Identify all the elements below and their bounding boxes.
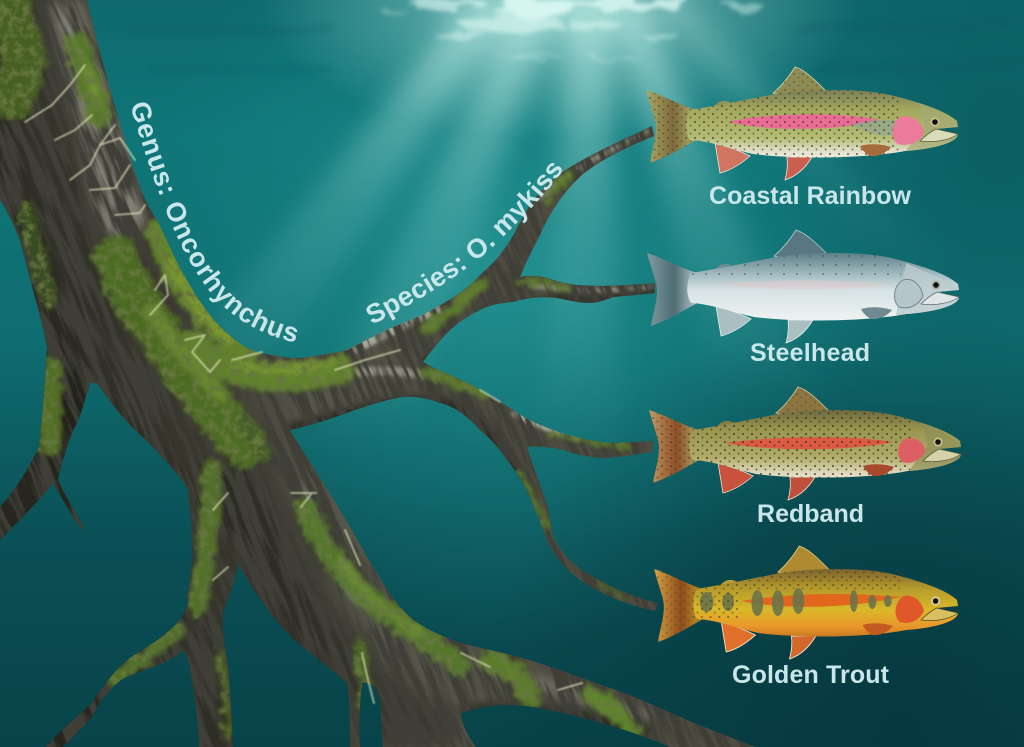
- lit bark on the upper trunk: [50, 0, 150, 255]
- fish: golden trout: [654, 546, 958, 659]
- label: species (curved): Species: O. mykiss: [366, 163, 562, 322]
- fish: redband: [649, 387, 963, 500]
- label: redband: Redband: [757, 500, 864, 528]
- fish: coastal rainbow: [646, 67, 960, 180]
- light rays: [150, 0, 960, 450]
- fish: steelhead: [647, 230, 961, 343]
- label: genus (curved): Genus: Oncorhynchus: [132, 102, 298, 342]
- label: steelhead: Steelhead: [750, 339, 870, 367]
- tree of life: trunk and branches: [0, 0, 755, 747]
- moss patches: [8, 0, 632, 738]
- directional bark grain: [0, 0, 755, 747]
- shaded sides: [33, 290, 87, 460]
- water caustic highlights: [25, 65, 582, 703]
- water surface ripples: [130, 0, 1020, 70]
- label: coastal rainbow: Coastal Rainbow: [709, 182, 912, 210]
- brighter moss highlights: [170, 265, 230, 340]
- label: golden trout: Golden Trout: [732, 661, 890, 689]
